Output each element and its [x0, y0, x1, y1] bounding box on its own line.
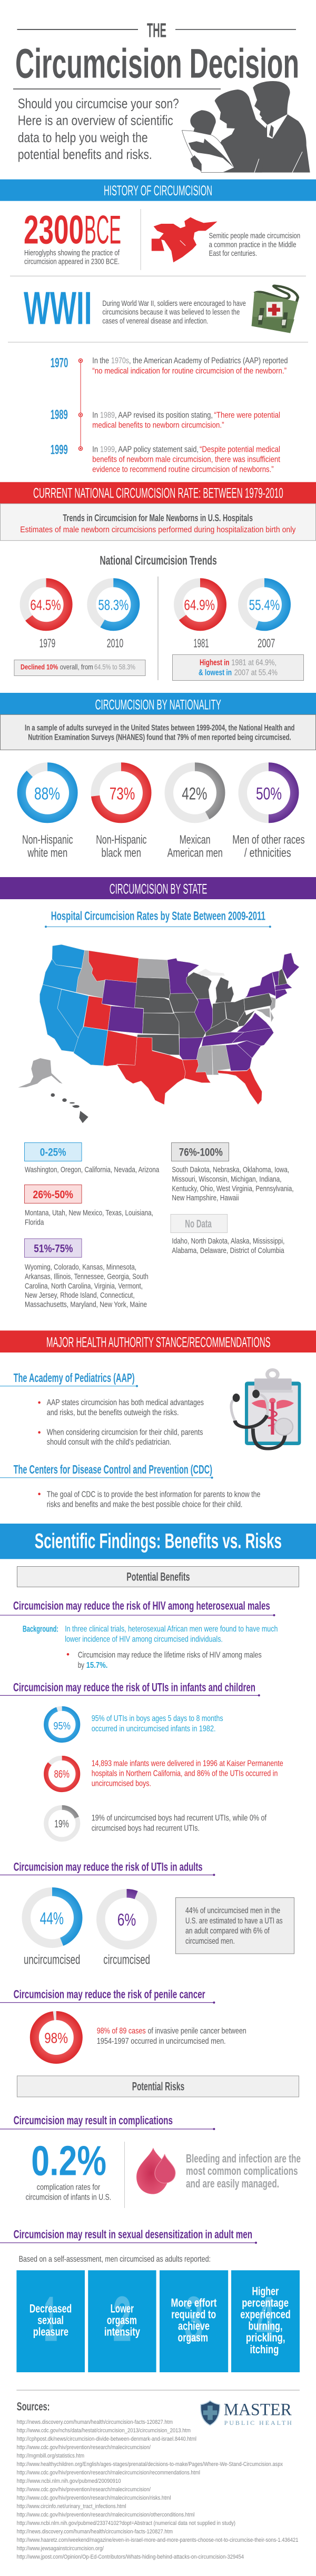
- donut: 44% uncircumcised: 44%: [40, 1909, 64, 1928]
- icon: medic bag: [252, 286, 298, 333]
- logo: master public health: PUBLIC HEALTH: [224, 2419, 292, 2426]
- callout: declined 10%: [14, 660, 145, 676]
- text: self-assessment intro: Based on a self-assessment, men circumcised as adults reported:: [19, 2255, 211, 2264]
- donut: black men: black men: [101, 846, 141, 860]
- legend: no data: No Data: [185, 1218, 212, 1230]
- donut: other races: [232, 767, 305, 860]
- timeline item: 1970: 1970s: [111, 356, 129, 365]
- callout: highest and lowest: & lowest in: [199, 669, 232, 678]
- band: major health authority: [0, 1330, 316, 1352]
- callout: 44 vs 6 percent: circumcised men.: [185, 1937, 235, 1946]
- panel: trends subtitle: [0, 504, 316, 541]
- legend: no data: Alabama, Delaware, District of Columbia: [172, 1246, 284, 1255]
- CDC bullet: The goal of CDC is to provide the best information for parents to know the: [47, 1490, 260, 1499]
- map: united states by rate: [18, 944, 299, 1123]
- text: semitic people: East for centuries.: [209, 250, 257, 258]
- callout: declined 10%: 64.5% to 58.3%: [94, 663, 135, 671]
- text: semitic people: a common practice in the Middle: [209, 241, 296, 249]
- donut: 2010: 58.3%: [98, 596, 129, 613]
- AAP bullets: and risks, but the benefits outweigh the risks.: [47, 1408, 179, 1417]
- HIV background text: lower incidence of HIV among circumcised individuals.: [65, 1635, 223, 1644]
- panel: potential benefits: Potential Benefits: [126, 1570, 190, 1584]
- stat: 0.2%: circumcision of infants in U.S.: [26, 2193, 111, 2202]
- callout: 44 vs 6 percent: 44% of uncircumcised men in the: [185, 1906, 280, 1915]
- donut: 2007: 2007: [258, 636, 275, 650]
- legend: 76%-100%: 76%-100%: [179, 1146, 223, 1159]
- donut: 2007: 55.4%: [249, 596, 280, 613]
- timeline item: 1999: “Despite potential medical: [200, 445, 280, 454]
- logo: master public health: [201, 2400, 292, 2426]
- timeline item: 1999: [51, 443, 280, 474]
- timeline item: 1989: In: [92, 411, 98, 420]
- legend: no data: Idaho, North Dakota, Alaska, Mississippi,: [172, 1237, 284, 1246]
- callout: declined 10%: overall, from: [60, 663, 93, 671]
- callout: highest and lowest: 2007 at 55.4%: [234, 669, 278, 678]
- donut: 95%: 95%: [53, 1720, 71, 1732]
- heading: penile cancer: Circumcision may reduce the risk of penile cancer: [14, 1988, 205, 2001]
- icon: clipboard and stethoscope: [231, 1370, 301, 1449]
- AAP bullets: should consult with the child's pediatrician.: [47, 1438, 171, 1447]
- title: [13, 20, 299, 89]
- timeline item: 1989: , AAP revised its position stating,: [115, 411, 213, 420]
- timeline item: 1970: [51, 356, 288, 375]
- timeline item: 1970: In the: [92, 356, 109, 365]
- donut: other races: 50%: [256, 784, 282, 803]
- legend: 76%-100%: New Hampshire, Hawaii: [172, 1193, 239, 1202]
- donut: 1981: [178, 583, 222, 650]
- band: circumcision by state: CIRCUMCISION BY STATE: [110, 881, 207, 897]
- donut: white men: white men: [27, 846, 67, 860]
- sources list: http://www.jpost.com/Opinion/Op-Ed-Contributors/Whats-hiding-behind-attacks-on-circumcision-329454: [17, 2554, 244, 2560]
- timeline item: 1999: 1999: [100, 445, 115, 454]
- card 1: Decreased: [29, 2302, 72, 2315]
- timeline item: 1989: 1989: [51, 407, 68, 422]
- stat: 0.2%: complication rates for: [37, 2183, 101, 2192]
- legend: 0-25%: [24, 1142, 160, 1175]
- band: circumcision by state: [0, 877, 316, 899]
- panel: potential risks: [17, 2076, 299, 2097]
- heading: AAP: [0, 1371, 138, 1387]
- timeline: [51, 356, 288, 474]
- sources list: http://www.cdc.gov/hiv/prevention/research/malecircumcision/otherconditions.html: [17, 2512, 194, 2518]
- donut: 2010: 2010: [107, 636, 123, 650]
- donut: mexican american men: 42%: [182, 784, 207, 803]
- card 3: More effort: [171, 2296, 217, 2310]
- heading: UTIs in infants: [0, 1680, 260, 1696]
- sources list: http://www.ncbi.nlm.nih.gov/pubmed/23374102?dopt=Abstract (numerical data not supplied in study): [17, 2520, 235, 2527]
- timeline item: 1999: benefits of newborn male circumcision, there was insufficient: [92, 455, 280, 464]
- panel: potential risks: Potential Risks: [132, 2080, 184, 2093]
- callout: highest and lowest: 1981 at 64.9%,: [231, 658, 276, 667]
- callout: highest and lowest: Highest in: [200, 658, 230, 667]
- text: penile cancer: of invasive penile cancer between: [147, 2027, 246, 2036]
- band: history of circumcision: [0, 180, 316, 201]
- donut: 19%: 19%: [54, 1818, 69, 1830]
- 2300 BCE callout: Hieroglyphs showing the practice of: [24, 249, 120, 257]
- card 2: [88, 2270, 156, 2372]
- heading: complications: [0, 2114, 215, 2130]
- heading: sources: Sources:: [17, 2400, 50, 2413]
- legend: 51%-75%: Arkansas, Illinois, Tennessee, Georgia, South: [25, 1272, 149, 1281]
- card 3: required to: [171, 2308, 216, 2321]
- band: history of circumcision: HISTORY OF CIRCUMCISION: [104, 183, 212, 198]
- CDC bullet: risks and benefits and make the best possible choice for their child.: [47, 1500, 242, 1509]
- donut: 2007: [242, 583, 287, 650]
- stat: 0.2%: 0.2%: [31, 2137, 106, 2184]
- intro text: Here is an overview of scientific: [18, 113, 173, 128]
- band: scientific findings: [0, 1524, 316, 1559]
- timeline item: 1999: 1999: [51, 443, 68, 457]
- donut: mexican american men: Mexican: [180, 833, 211, 847]
- card 4: prickling,: [246, 2331, 285, 2344]
- text: penile cancer: 1954-1997 occurred in uncircumcised men.: [97, 2037, 226, 2046]
- card 2: Lower: [111, 2302, 134, 2315]
- timeline item: 1999: In: [92, 445, 98, 454]
- sources list: http://www.cdc.gov/hiv/prevention/research/malecircumcision/recommendations.html: [17, 2470, 200, 2476]
- panel: potential benefits: [17, 1567, 299, 1587]
- card 3: 3: [184, 2283, 203, 2355]
- legend: 51%-75%: Wyoming, Colorado, Kansas, Minnesota,: [25, 1262, 136, 1271]
- heading: complications: Circumcision may result in complications: [14, 2114, 173, 2127]
- timeline item: 1970: 1970: [51, 356, 68, 371]
- donut: 2010: [92, 583, 135, 650]
- legend: 26%-50%: Montana, Utah, New Mexico, Texas, Louisiana,: [25, 1209, 153, 1218]
- donut: 95%: [46, 1708, 78, 1740]
- text: world war II: circumcisions because it was believed to lessen the: [102, 309, 240, 317]
- legend: 51%-75%: Massachusetts, Maryland, New York, Maine: [25, 1300, 147, 1309]
- card 4: burning,: [249, 2320, 282, 2333]
- card 4: experienced: [240, 2308, 291, 2321]
- donut: 1979: 64.5%: [30, 596, 61, 613]
- HIV background text: Background:: [23, 1624, 58, 1634]
- card 4: itching: [250, 2343, 279, 2356]
- donut: 19%: [46, 1807, 78, 1839]
- sources list: http://www.cdc.gov/hiv/prevention/research/malecircumcision/: [17, 2444, 151, 2451]
- card 3: orgasm: [178, 2331, 208, 2344]
- text: 95% UTIs: 95% of UTIs in boys ages 5 days to 8 months: [92, 1714, 223, 1723]
- card 3: achieve: [178, 2320, 210, 2333]
- heading: HIV: [0, 1599, 275, 1616]
- card 4: 4: [256, 2283, 275, 2355]
- sources list: http://www.ncbi.nlm.nih.gov/pubmed/20090910: [17, 2478, 121, 2484]
- card 4: Higher: [252, 2285, 279, 2298]
- donut: mexican american men: American men: [167, 846, 223, 860]
- donut: mexican american men: [167, 767, 223, 860]
- panel: trends subtitle: Estimates of male newborn circumcisions performed during hospitalization birth only: [20, 525, 296, 534]
- text: 19% UTIs: 19% of uncircumcised boys had recurrent UTIs, while 0% of: [92, 1814, 266, 1823]
- donut: 6% circumcised: [101, 1893, 153, 1967]
- HIV bullet: 15.7%.: [86, 1661, 107, 1670]
- text: 19% UTIs: circumcised boys had recurrent UTIs.: [92, 1824, 200, 1833]
- card 3: [160, 2270, 228, 2372]
- card 1: pleasure: [33, 2325, 68, 2339]
- sources list: http://www.circinfo.net/urinary_tract_infections.html: [17, 2503, 126, 2510]
- donut: white men: [22, 767, 73, 860]
- card 4: [231, 2270, 300, 2372]
- card 2: orgasm: [107, 2314, 137, 2327]
- title: THE: [147, 20, 166, 42]
- donut: black men: Non-Hispanic: [96, 833, 147, 847]
- panel: nationality summary: [0, 714, 316, 750]
- sources list: http://www.cdc.gov/hiv/prevention/research/malecircumcision/risks.html: [17, 2495, 171, 2501]
- 2300 BCE callout: 2300: [24, 208, 84, 253]
- callout: 44 vs 6 percent: U.S. are estimated to have a UTI as: [185, 1916, 282, 1925]
- icon: blood drops: [136, 2147, 175, 2194]
- intro text: data to help you weigh the: [18, 130, 148, 145]
- donut: 1981: 1981: [193, 636, 209, 650]
- donut: white men: Non-Hispanic: [22, 833, 73, 847]
- donut: 98%: [34, 2015, 78, 2060]
- AAP bullets: [38, 1398, 204, 1447]
- donut: 44% uncircumcised: uncircumcised: [24, 1953, 80, 1967]
- heading: UTIs in adults: [0, 1860, 215, 1876]
- legend: 51%-75%: New Jersey, Rhode Island, Connecticut,: [25, 1291, 135, 1300]
- timeline item: 1989: “There were potential: [214, 411, 280, 420]
- sources list: http://cphpost.dk/news/circumcision-divide-between-denmark-and-israel.8440.html: [17, 2436, 196, 2442]
- intro text: Should you circumcise your son?: [18, 96, 179, 112]
- donut: 86%: 86%: [54, 1769, 70, 1781]
- timeline item: 1999: , AAP policy statement said,: [115, 445, 199, 454]
- timeline item: 1989: medical benefits to newborn circumcision.”: [92, 421, 224, 430]
- card 1: 1: [44, 2283, 57, 2355]
- legend: 0-25%: 0-25%: [40, 1146, 66, 1159]
- intro text: potential benefits and risks.: [18, 146, 152, 162]
- HIV bullet: by: [78, 1661, 84, 1670]
- card 4: percentage: [242, 2296, 289, 2310]
- donut: 86%: [46, 1758, 78, 1790]
- 2300 BCE callout: [24, 208, 121, 266]
- icon: middle east map: [152, 217, 218, 262]
- WWII callout: WWII: [24, 282, 92, 334]
- donut: black men: 73%: [110, 784, 135, 803]
- heading: UTIs in adults: Circumcision may reduce the risk of UTIs in adults: [14, 1860, 203, 1873]
- card 2: 2: [113, 2283, 132, 2355]
- card 1: sexual: [37, 2314, 64, 2327]
- legend: 76%-100%: Missouri, Wisconsin, Michigan, Indiana,: [172, 1175, 282, 1183]
- legend: 26%-50%: Florida: [25, 1218, 44, 1227]
- text: penile cancer: [97, 2027, 246, 2046]
- band: circumcision by nationality: [0, 693, 316, 714]
- icon: family silhouette: [182, 81, 310, 173]
- heading: CDC: [0, 1463, 213, 1479]
- text: world war II: cases of venereal disease and infection.: [102, 317, 208, 326]
- sources list: http://www.cdc.gov/hiv/prevention/research/malecircumcision/: [17, 2487, 151, 2493]
- callout: 44 vs 6 percent: an adult compared with 6% of: [185, 1927, 270, 1936]
- sources list: http://www.cdc.gov/nchs/data/hestat/circumcision_2013/circumcision_2013.htm: [17, 2428, 191, 2434]
- card 1: [16, 2270, 85, 2372]
- donut: other races: / ethnicities: [244, 846, 291, 860]
- donut: 44% uncircumcised: [24, 1892, 80, 1967]
- legend: 0-25%: Washington, Oregon, California, Nevada, Arizona: [25, 1166, 160, 1175]
- card 2: intensity: [104, 2325, 140, 2339]
- legend: 76%-100%: [172, 1142, 294, 1202]
- donut: black men: [95, 767, 147, 860]
- text: penile cancer: 98% of 89 cases: [97, 2027, 146, 2036]
- legend: 26%-50%: 26%-50%: [33, 1188, 73, 1201]
- donut: 1981: 64.9%: [184, 596, 215, 613]
- callout: highest and lowest: [173, 655, 303, 680]
- logo: master public health: MASTER: [224, 2400, 292, 2419]
- HIV bullet: [67, 1651, 262, 1670]
- heading: hospital rates by state: [45, 909, 271, 928]
- callout: 44 vs 6 percent: [176, 1897, 294, 1954]
- text: 95% UTIs: occurred in uncircumcised infants in 1982.: [92, 1724, 216, 1733]
- AAP bullets: When considering circumcision for their child, parents: [47, 1428, 203, 1437]
- sources list: http://news.discovery.com/human/health/circumcision-facts-120827.htm: [17, 2419, 173, 2425]
- 2300 BCE callout: circumcision appeared in 2300 BCE.: [24, 258, 120, 266]
- timeline item: 1999: evidence to recommend routine circumcision of newborns.”: [92, 465, 274, 474]
- sources list: http://www.jewsagainstcircumcision.org/: [17, 2545, 104, 2552]
- stat: 0.2%: [26, 2137, 111, 2202]
- sources list: http://news.discovery.com/human/health/circumcision-facts-120827.htm: [17, 2529, 173, 2535]
- HIV bullet: Circumcision may reduce the lifetime risks of HIV among males: [78, 1651, 262, 1660]
- timeline item: 1989: [51, 407, 280, 430]
- timeline item: 1989: 1989: [100, 411, 115, 420]
- heading: penile cancer: [0, 1988, 215, 2004]
- legend: 51%-75%: [24, 1239, 149, 1309]
- band: current national rate: [0, 482, 316, 504]
- legend: 51%-75%: Carolina, North Carolina, Virginia, Vermont,: [25, 1281, 143, 1290]
- donut: white men: 88%: [34, 784, 60, 803]
- text: BCE: [84, 208, 121, 253]
- heading: AAP: The Academy of Pediatrics (AAP): [14, 1371, 135, 1385]
- text: world war II: During World War II, soldiers were encouraged to have: [102, 300, 246, 308]
- heading: national trends: National Circumcision Trends: [100, 554, 217, 568]
- sources list: http://mgmbill.org/statistics.htm: [17, 2453, 84, 2459]
- donut: 6% circumcised: 6%: [117, 1911, 136, 1929]
- legend: 26%-50%: [24, 1185, 153, 1227]
- heading: sexual desensitization: [0, 2228, 257, 2244]
- band: circumcision by nationality: CIRCUMCISION BY NATIONALITY: [95, 697, 221, 713]
- callout: declined 10%: Declined 10%: [21, 663, 58, 671]
- HIV background text: [23, 1624, 278, 1644]
- AAP bullets: AAP states circumcision has both medical advantages: [47, 1398, 204, 1407]
- donut: 98%: 98%: [44, 2030, 68, 2046]
- text: bleeding and infection: and are easily managed.: [186, 2177, 279, 2190]
- donut: 1979: 1979: [39, 636, 55, 650]
- donut: 1979: [24, 583, 68, 650]
- CDC bullet: [38, 1490, 260, 1509]
- legend: 51%-75%: 51%-75%: [34, 1242, 73, 1255]
- donut: 6% circumcised: circumcised: [103, 1953, 150, 1967]
- legend: no data: [171, 1214, 284, 1255]
- text: 86% UTIs: uncircumcised boys.: [92, 1779, 151, 1788]
